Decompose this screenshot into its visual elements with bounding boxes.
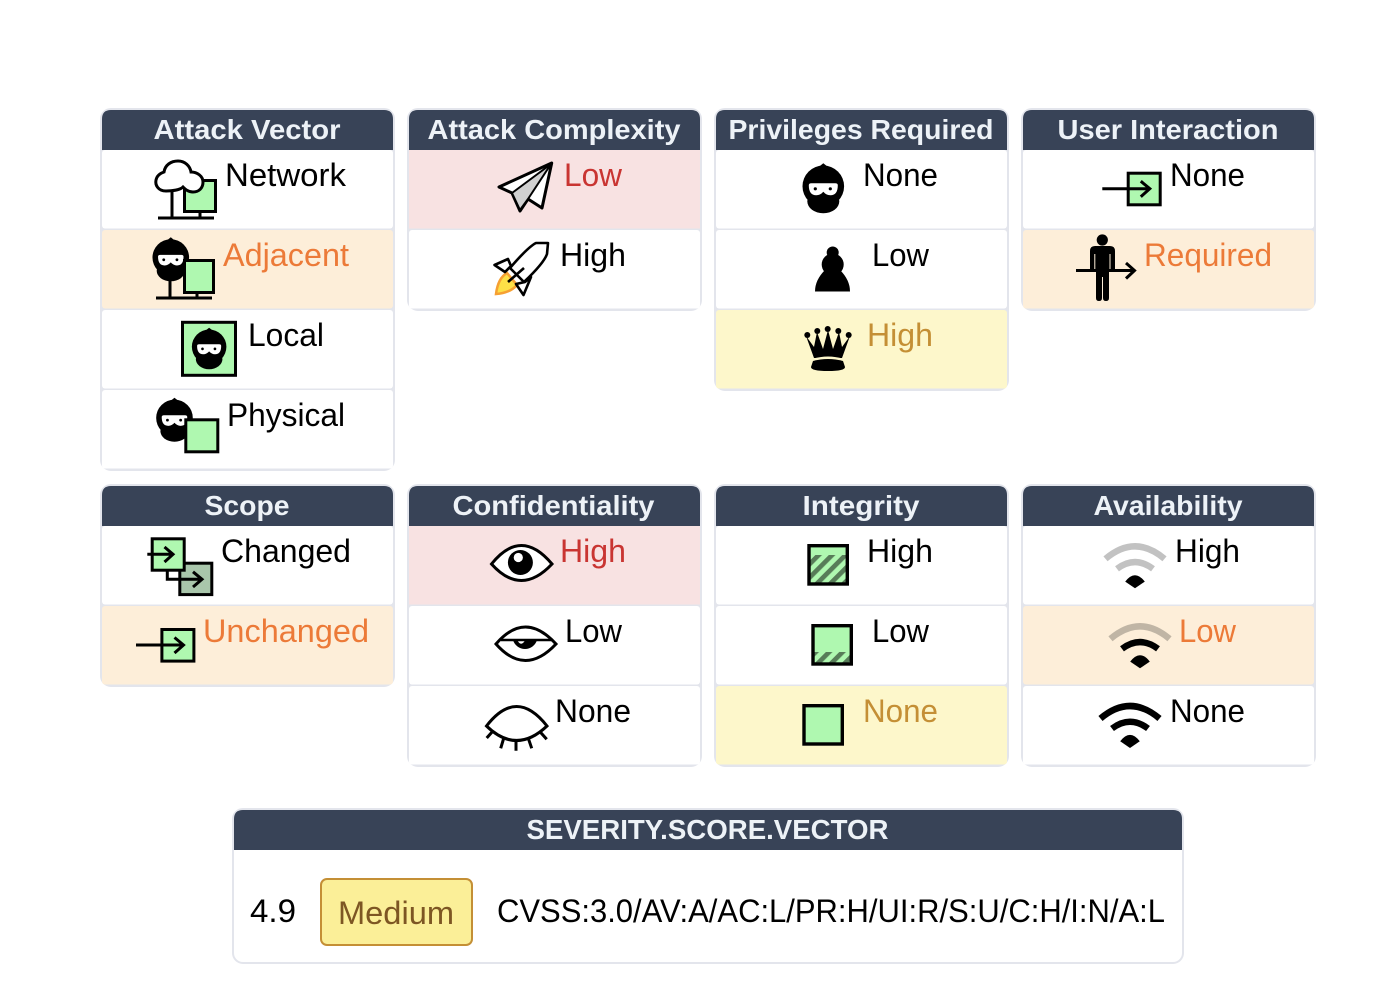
label: low: Low [565, 613, 623, 649]
label: low: Low [1179, 613, 1237, 649]
row: none [1023, 686, 1314, 764]
row: changed [102, 526, 393, 604]
heading: confidentiality: Confidentiality [452, 490, 655, 521]
row: low [716, 606, 1007, 684]
label: required: Required [1144, 237, 1272, 273]
icon: rocket [494, 243, 548, 295]
label: none: None [863, 157, 938, 193]
icon: arrow into box [1102, 173, 1160, 205]
heading: availability: Availability [1094, 490, 1243, 521]
heading: privileges required [716, 110, 1007, 150]
label: none: None [1170, 157, 1245, 193]
icon: open eye [492, 546, 552, 580]
row: low [409, 606, 700, 684]
row: low [716, 230, 1007, 308]
score value: 4.9 [250, 893, 296, 929]
icon: arrow into box [136, 630, 194, 661]
panel: attack complexity [408, 109, 701, 310]
heading: severity score vector [234, 810, 1182, 850]
label: high: High [867, 533, 933, 569]
label: network: Network [225, 157, 347, 193]
label: physical: Physical [227, 397, 345, 433]
heading: confidentiality [409, 486, 700, 526]
icon: person with arrow [1076, 234, 1134, 301]
label: local: Local [248, 317, 324, 353]
panel: severity score vector [233, 809, 1183, 963]
row: high [1023, 526, 1314, 604]
icon: ninja beside box [156, 398, 218, 452]
vector string: CVSS:3.0/AV:A/AC:L/PR:H/UI:R/S:U/C:H/I:N/A:L [497, 893, 1165, 929]
heading: user interaction: User Interaction [1058, 114, 1278, 145]
icon: closed eye [486, 706, 547, 751]
row: required [1023, 230, 1314, 308]
icon: lightly hatched square [813, 626, 851, 664]
row: local [102, 310, 393, 388]
label: adjacent: Adjacent [223, 237, 349, 273]
icon: ninja and monitor [152, 237, 214, 298]
row: high [716, 310, 1007, 388]
label: none: None [555, 693, 631, 729]
row: none [716, 686, 1007, 764]
label: unchanged: Unchanged [203, 613, 369, 649]
label: high: High [560, 237, 626, 273]
icon: cloud tree and monitor [156, 161, 216, 218]
row: low [409, 150, 700, 228]
row: none [716, 150, 1007, 228]
severity badge [321, 879, 472, 945]
row: low [1023, 606, 1314, 684]
icon: wifi two bars [1110, 626, 1170, 668]
label: none: None [1170, 693, 1245, 729]
heading: attack complexity [409, 110, 700, 150]
label: low: Low [872, 237, 930, 273]
icon: wifi one bar [1106, 546, 1164, 588]
icon: half-closed eye [496, 627, 556, 660]
heading: availability [1023, 486, 1314, 526]
icon: plain square [804, 706, 842, 744]
heading: scope: Scope [204, 490, 290, 521]
heading: user interaction [1023, 110, 1314, 150]
row: high [409, 526, 700, 604]
icon: wifi full [1100, 706, 1160, 748]
severity badge: Medium [338, 895, 454, 931]
icon: ninja [802, 163, 844, 213]
panel: confidentiality [408, 485, 701, 766]
heading: attack complexity: Attack Complexity [428, 114, 681, 145]
label: changed: Changed [221, 533, 351, 569]
panel: availability [1022, 485, 1315, 766]
panel: user interaction [1022, 109, 1315, 310]
row: adjacent [102, 230, 393, 308]
icon: arrow crossing two boxes [147, 539, 212, 595]
heading: privileges required: Privileges Required [728, 114, 994, 145]
heading: integrity [716, 486, 1007, 526]
row: unchanged [102, 606, 393, 684]
panel: integrity [715, 485, 1008, 766]
heading: integrity: Integrity [802, 490, 920, 521]
row: none [1023, 150, 1314, 228]
icon: pawn [815, 246, 850, 292]
label: high: High [867, 317, 933, 353]
heading: severity score vector: SEVERITY.SCORE.VECTOR [526, 814, 888, 845]
row: high [409, 230, 700, 308]
row: network [102, 150, 393, 228]
row: high [716, 526, 1007, 604]
row: none [409, 686, 700, 764]
row: physical [102, 390, 393, 468]
heading: attack vector [102, 110, 393, 150]
icon: paper plane [499, 163, 552, 211]
icon: ninja inside box [182, 322, 236, 375]
label: none: None [863, 693, 938, 729]
icon: crown [804, 326, 852, 371]
panel: attack vector [101, 109, 394, 470]
heading: scope [102, 486, 393, 526]
label: low: Low [872, 613, 930, 649]
icon: mostly hatched square [809, 546, 847, 584]
label: low: Low [564, 157, 623, 193]
panel: privileges required [715, 109, 1008, 390]
label: high: High [560, 533, 626, 569]
label: high: High [1175, 533, 1240, 569]
heading: attack vector: Attack Vector [154, 114, 341, 145]
panel: scope [101, 485, 394, 686]
